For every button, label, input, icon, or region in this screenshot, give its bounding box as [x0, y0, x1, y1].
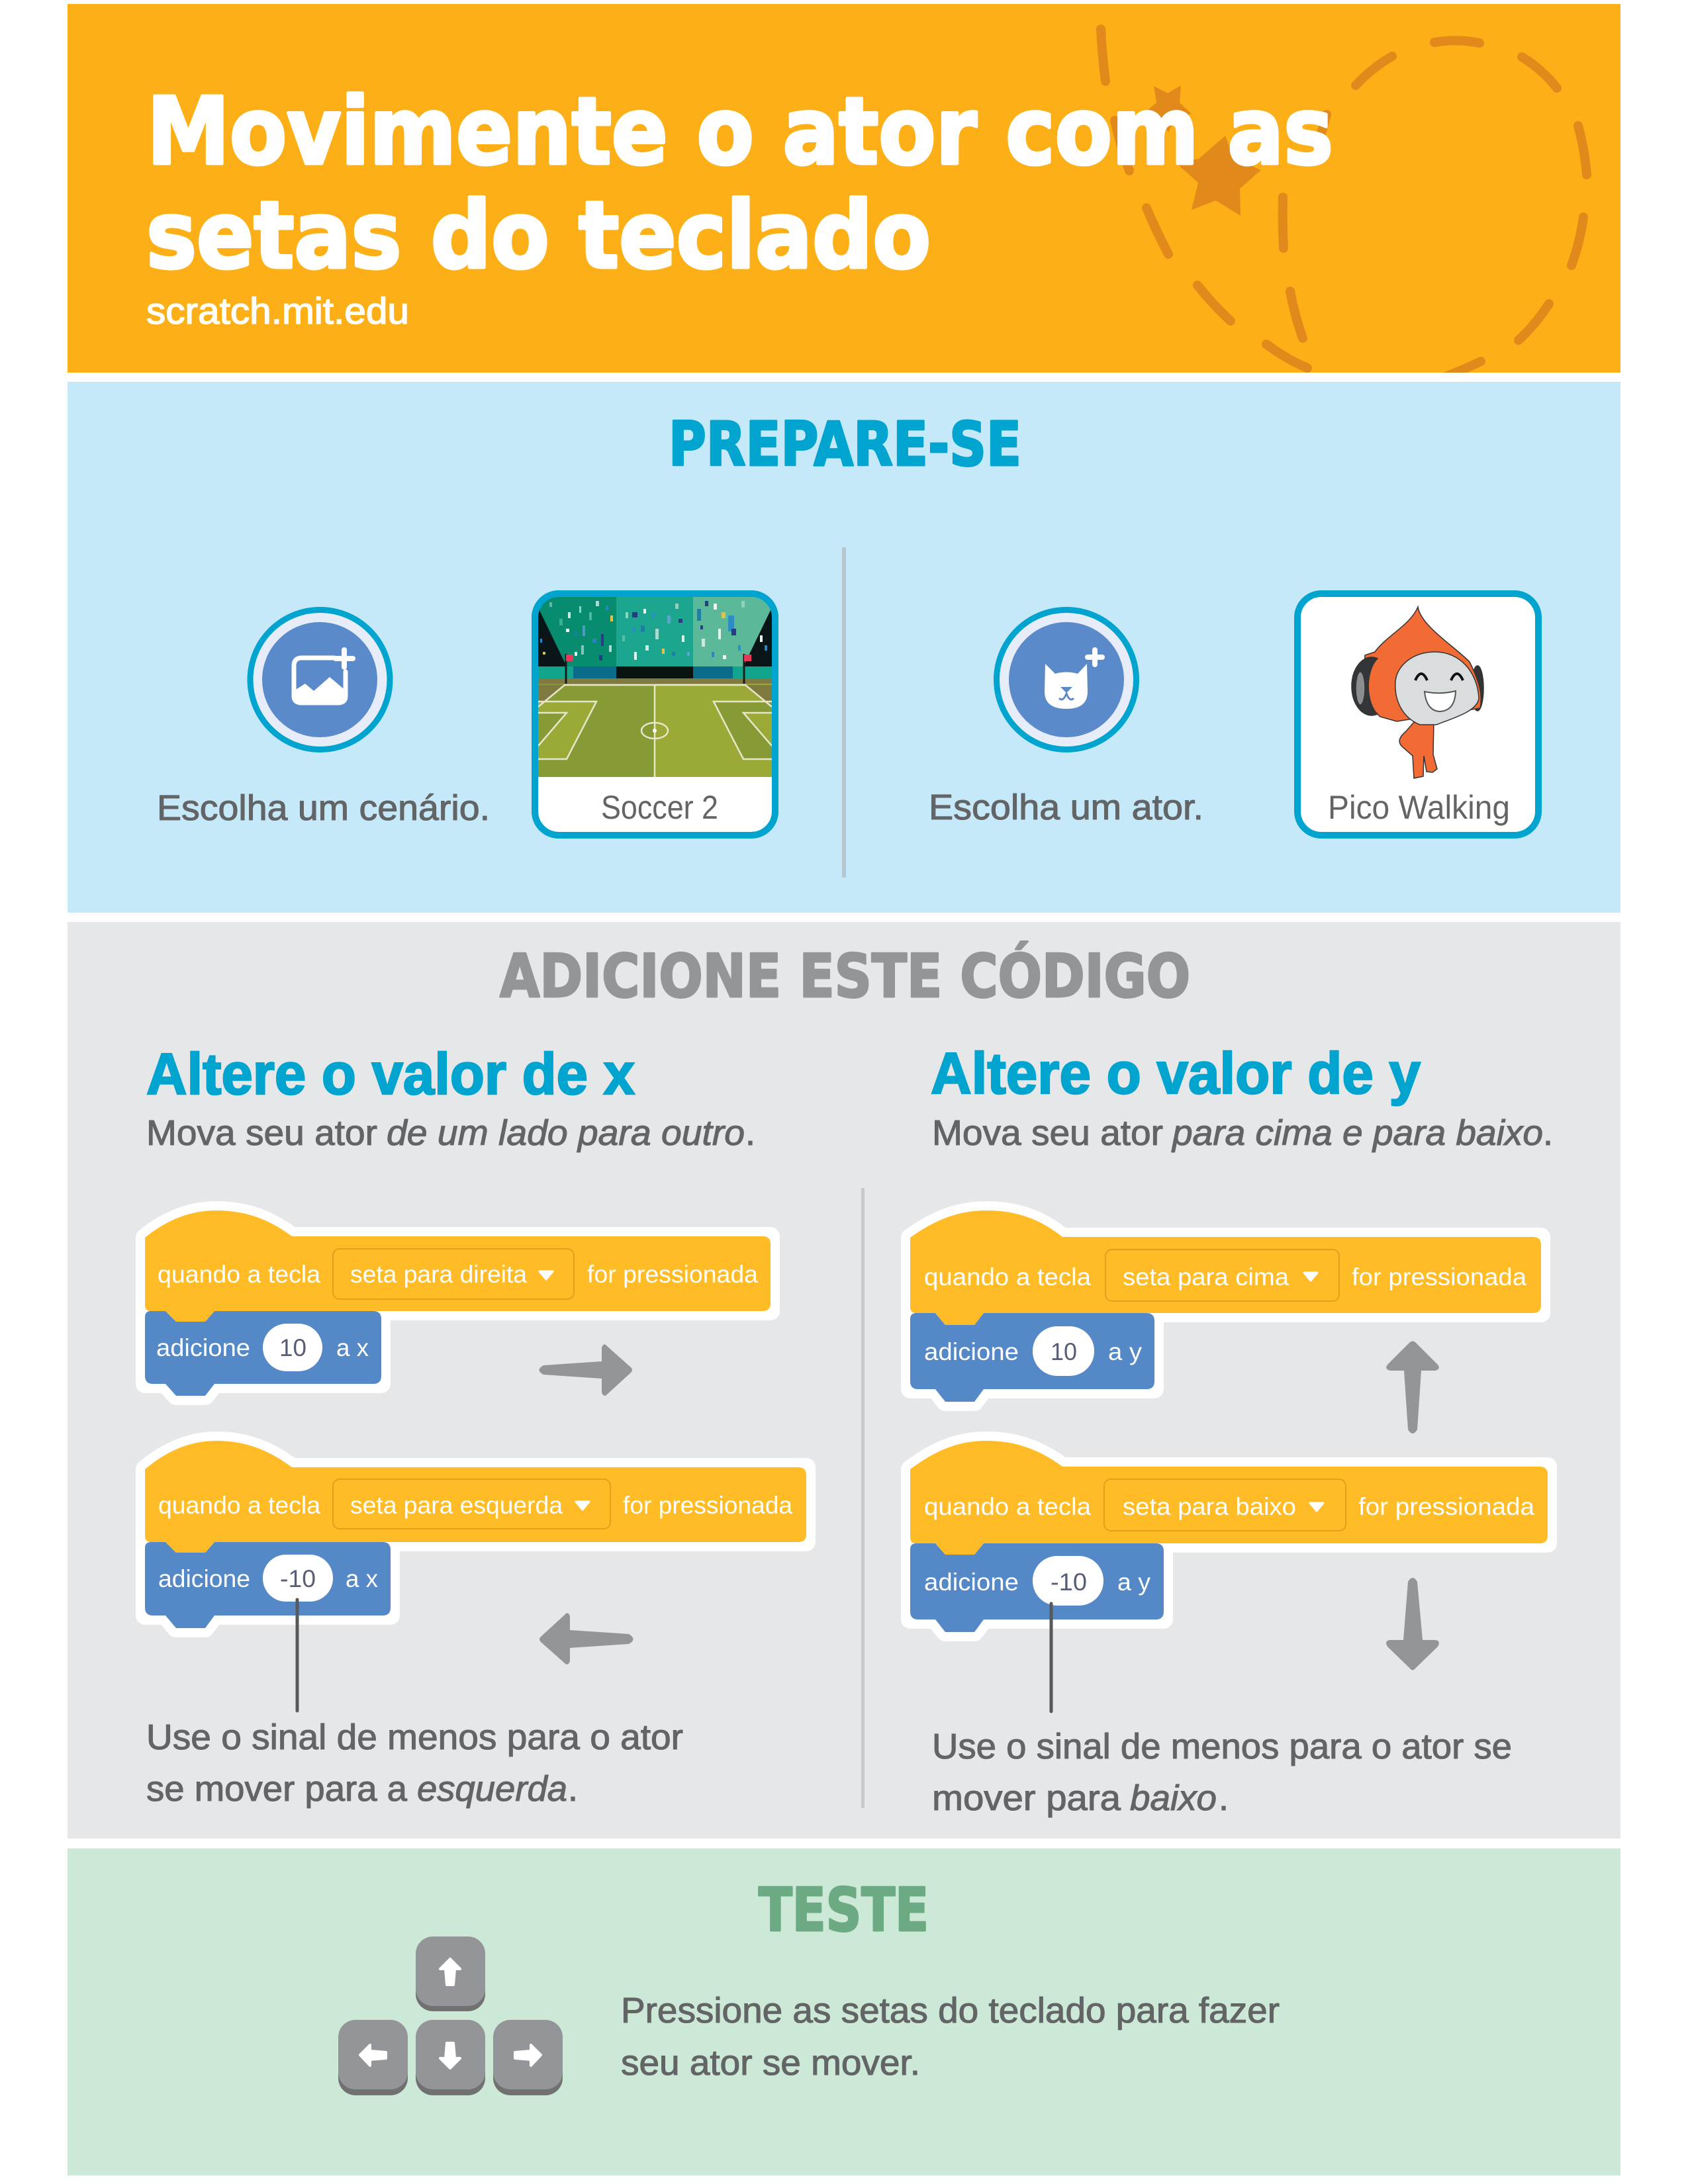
code block: left arrow key: quando a tecla — [158, 1492, 320, 1519]
description: y: Mova seu ator — [932, 1113, 1163, 1153]
icon: choose backdrop button — [250, 610, 390, 749]
column heading: x: Altere o valor de x — [146, 1041, 635, 1107]
card: Soccer 2 backdrop — [535, 594, 775, 835]
instructions text — [621, 1991, 1280, 2083]
panel: prepare-se — [68, 382, 1620, 913]
description: y: para cima e para baixo — [1171, 1113, 1543, 1153]
description: y — [932, 1113, 1553, 1153]
arrow: up — [1386, 1341, 1439, 1433]
code block: right arrow key: 10 — [279, 1334, 306, 1361]
callout text: right: Use o sinal de menos para o ator se — [932, 1727, 1512, 1766]
code block: right arrow key: for pressionada — [587, 1261, 758, 1288]
decoration: dashed motion path and stars — [1101, 29, 1587, 379]
icon: arrow keys — [338, 1936, 563, 2095]
code block: left arrow key — [145, 1441, 806, 1628]
callout text: right: . — [1219, 1778, 1229, 1818]
code block: down arrow key: seta para baixo — [1123, 1493, 1296, 1520]
label: choose backdrop: Escolha um cenário. — [157, 788, 490, 828]
code block: left arrow key: a x — [346, 1565, 378, 1592]
callout line: left — [295, 1600, 299, 1711]
code block: up arrow key: adicione — [924, 1338, 1019, 1365]
code block: right arrow key: adicione — [156, 1334, 250, 1361]
code block: up arrow key: seta para cima — [1123, 1263, 1289, 1291]
code block: left arrow key: seta para esquerda — [350, 1492, 563, 1519]
instructions text: Pressione as setas do teclado para fazer — [621, 1991, 1280, 2030]
image: soccer field — [538, 597, 772, 777]
description: x: . — [745, 1113, 755, 1153]
callout text: left: esquerda — [417, 1769, 567, 1809]
code block: right arrow key: a x — [336, 1334, 369, 1361]
code block: up arrow key: a y — [1108, 1338, 1143, 1365]
code block: down arrow key: -10 — [1051, 1569, 1087, 1596]
code block: left arrow key: -10 — [280, 1565, 316, 1592]
panel: title header — [68, 4, 1620, 379]
column heading: y: Altere o valor de y — [931, 1040, 1421, 1106]
code block: right arrow key: seta para direita — [350, 1261, 527, 1288]
heading: adicione este codigo: ADICIONE ESTE CÓDIGO — [500, 940, 1190, 1011]
code block: left arrow key: for pressionada — [623, 1492, 792, 1519]
callout text: right: baixo — [1130, 1778, 1217, 1818]
code block: up arrow key — [910, 1210, 1541, 1402]
code block: right arrow key — [145, 1210, 771, 1396]
heading: prepare-se: PREPARE-SE — [669, 409, 1021, 480]
code block: up arrow key: for pressionada — [1352, 1263, 1526, 1291]
title line 2: setas do teclado — [146, 182, 931, 290]
callout text: left — [146, 1717, 683, 1809]
callout text: left: se mover para a — [146, 1769, 408, 1809]
card label: Pico Walking — [1328, 789, 1510, 826]
illustration: Pico — [1352, 607, 1483, 778]
code block: up arrow key: 10 — [1051, 1338, 1077, 1365]
url: scratch.mit.edu — [146, 290, 409, 332]
code block: down arrow key: adicione — [924, 1569, 1019, 1596]
instructions text: seu ator se mover. — [621, 2043, 920, 2083]
description: x — [146, 1113, 755, 1153]
callout text: left: . — [568, 1769, 578, 1809]
panel: adicione este codigo — [68, 922, 1620, 1839]
heading: teste: TESTE — [759, 1876, 929, 1945]
title line 1: Movimente o ator com as — [147, 78, 1333, 186]
callout text: left: Use o sinal de menos para o ator — [146, 1717, 683, 1757]
callout line: right — [1050, 1604, 1053, 1711]
label: choose sprite: Escolha um ator. — [929, 788, 1203, 827]
code block: up arrow key: quando a tecla — [924, 1263, 1091, 1291]
code block: left arrow key: adicione — [158, 1565, 250, 1592]
code block: right arrow key: quando a tecla — [158, 1261, 320, 1288]
card: Pico Walking sprite — [1297, 594, 1538, 835]
panel: teste — [68, 1848, 1620, 2175]
arrow: down — [1386, 1578, 1439, 1670]
code block: down arrow key: a y — [1117, 1569, 1151, 1596]
code block: down arrow key: for pressionada — [1358, 1493, 1534, 1520]
arrow: right — [539, 1344, 632, 1396]
description: x: de um lado para outro — [387, 1113, 745, 1153]
arrow: left — [539, 1613, 633, 1664]
code block: down arrow key — [910, 1441, 1548, 1632]
icon: choose sprite button — [997, 610, 1136, 749]
description: x: Mova seu ator — [146, 1113, 377, 1153]
callout text: right — [932, 1727, 1512, 1818]
card label: Soccer 2 — [601, 789, 718, 826]
code block: down arrow key: quando a tecla — [924, 1493, 1091, 1520]
callout text: right: mover para — [932, 1778, 1121, 1818]
description: y: . — [1543, 1113, 1553, 1153]
